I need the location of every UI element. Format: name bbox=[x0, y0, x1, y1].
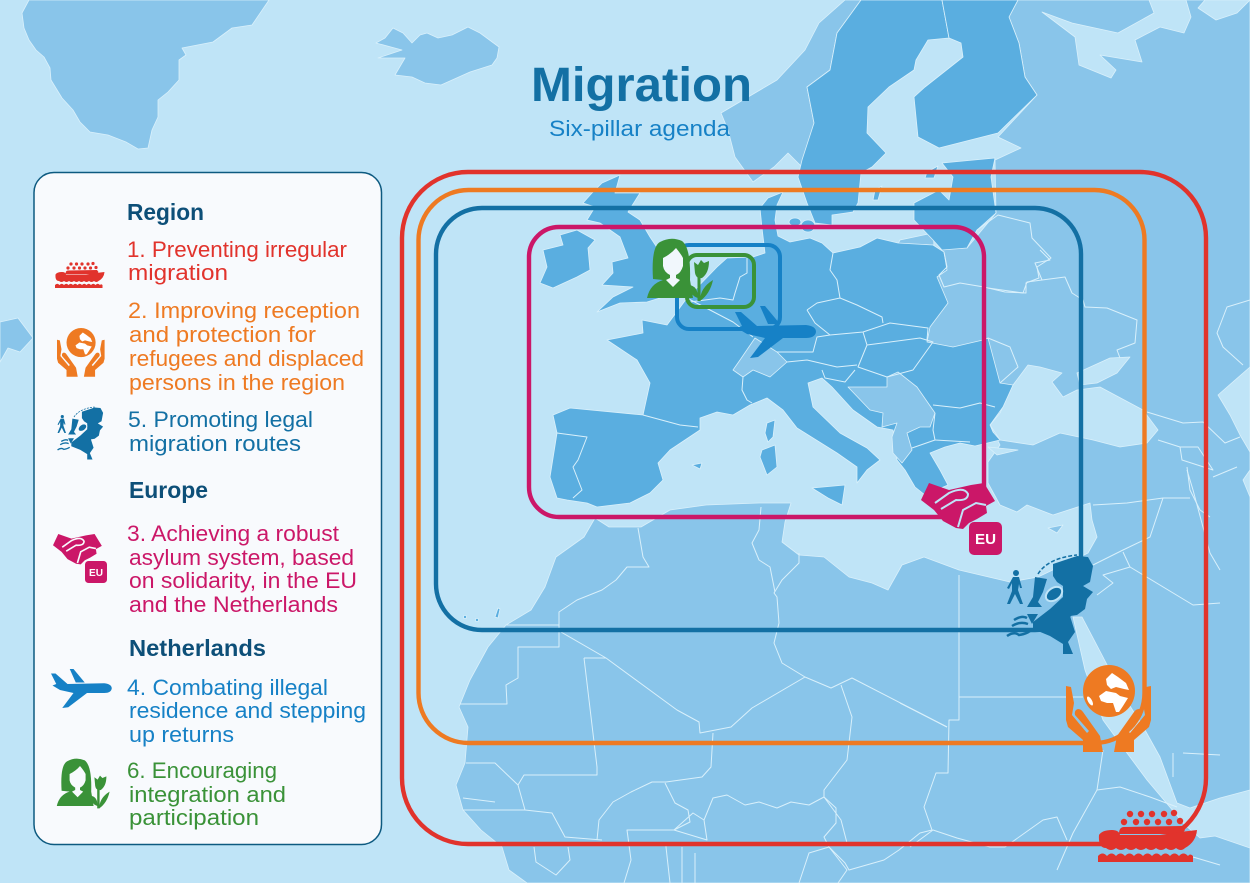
text: pillar 2: persons in the region bbox=[129, 370, 345, 395]
frame: region, preventing irregular migration bbox=[402, 172, 1206, 844]
text: pillar 4: 4. Combating illegal bbox=[127, 675, 328, 700]
text: pillar 3: and the Netherlands bbox=[129, 592, 338, 617]
text: pillar 6: participation bbox=[129, 805, 259, 830]
frame: region, legal migration routes bbox=[436, 208, 1081, 630]
text: pillar 2: and protection for bbox=[129, 322, 317, 347]
non-EU Europe: Switzerland and western Balkans bbox=[733, 338, 935, 463]
icon: Netherlands with migrant bbox=[58, 407, 103, 459]
icon: EU badge on map: EU bbox=[975, 531, 996, 548]
text: pillar 1: 1. Preventing irregular bbox=[127, 237, 347, 262]
icon: woman with tulip bbox=[57, 759, 110, 808]
icon: handshake on map bbox=[921, 483, 995, 529]
seas over land bbox=[988, 0, 1250, 848]
text: pillar 2: 2. Improving reception bbox=[128, 298, 360, 323]
icon: EU badge on map bbox=[969, 522, 1002, 555]
icon: woman with tulip on map bbox=[647, 239, 713, 301]
frame: Europe, asylum system bbox=[529, 227, 984, 517]
text: pillar 6: integration and bbox=[129, 782, 286, 807]
title: Migration bbox=[531, 59, 752, 112]
text: pillar 2 bbox=[128, 298, 364, 395]
text: pillar 3: 3. Achieving a robust bbox=[127, 521, 340, 546]
text: pillar 5 bbox=[128, 407, 313, 456]
icon: handshake with EU badge bbox=[53, 534, 107, 583]
icon: hands holding globe bbox=[57, 328, 105, 377]
text: pillar 3: asylum system, based bbox=[129, 545, 354, 570]
heading: Netherlands: Netherlands bbox=[129, 635, 266, 661]
EU land bbox=[463, 0, 1037, 622]
text: pillar 4: up returns bbox=[129, 722, 234, 747]
country borders bbox=[460, 215, 1250, 883]
frame: Netherlands, illegal residence and returns bbox=[677, 245, 780, 329]
text: pillar 6: 6. Encouraging bbox=[127, 758, 277, 783]
heading: Region: Region bbox=[127, 199, 204, 225]
icon: plane on map bbox=[735, 306, 816, 358]
text: pillar 3: on solidarity, in the EU bbox=[129, 568, 357, 593]
frame: region, reception and protection bbox=[418, 190, 1144, 743]
text: pillar 4 bbox=[127, 675, 366, 747]
panel: legend bbox=[34, 172, 382, 844]
text: pillar 5: migration routes bbox=[129, 431, 301, 456]
text: pillar 1 bbox=[127, 237, 347, 285]
text: pillar 3 bbox=[127, 521, 357, 617]
text: pillar 5: 5. Promoting legal bbox=[128, 407, 313, 432]
icon: plane bbox=[51, 669, 112, 708]
text: pillar 6 bbox=[127, 758, 286, 830]
subtitle: Six-pillar agenda bbox=[549, 116, 731, 141]
text: pillar 1: migration bbox=[128, 260, 228, 285]
icon: migrant boat on map bbox=[1098, 810, 1197, 862]
icon: Netherlands with migrant on map bbox=[1007, 555, 1093, 654]
text: pillar 4: residence and stepping bbox=[129, 698, 366, 723]
frame: Netherlands, integration bbox=[687, 255, 754, 307]
text: pillar 2: refugees and displaced bbox=[129, 346, 364, 371]
heading: Europe: Europe bbox=[129, 477, 208, 503]
icon: boat bbox=[55, 262, 104, 288]
icon: hands holding globe on map bbox=[1066, 665, 1151, 752]
icon: handshake with EU badge: EU bbox=[89, 568, 103, 579]
